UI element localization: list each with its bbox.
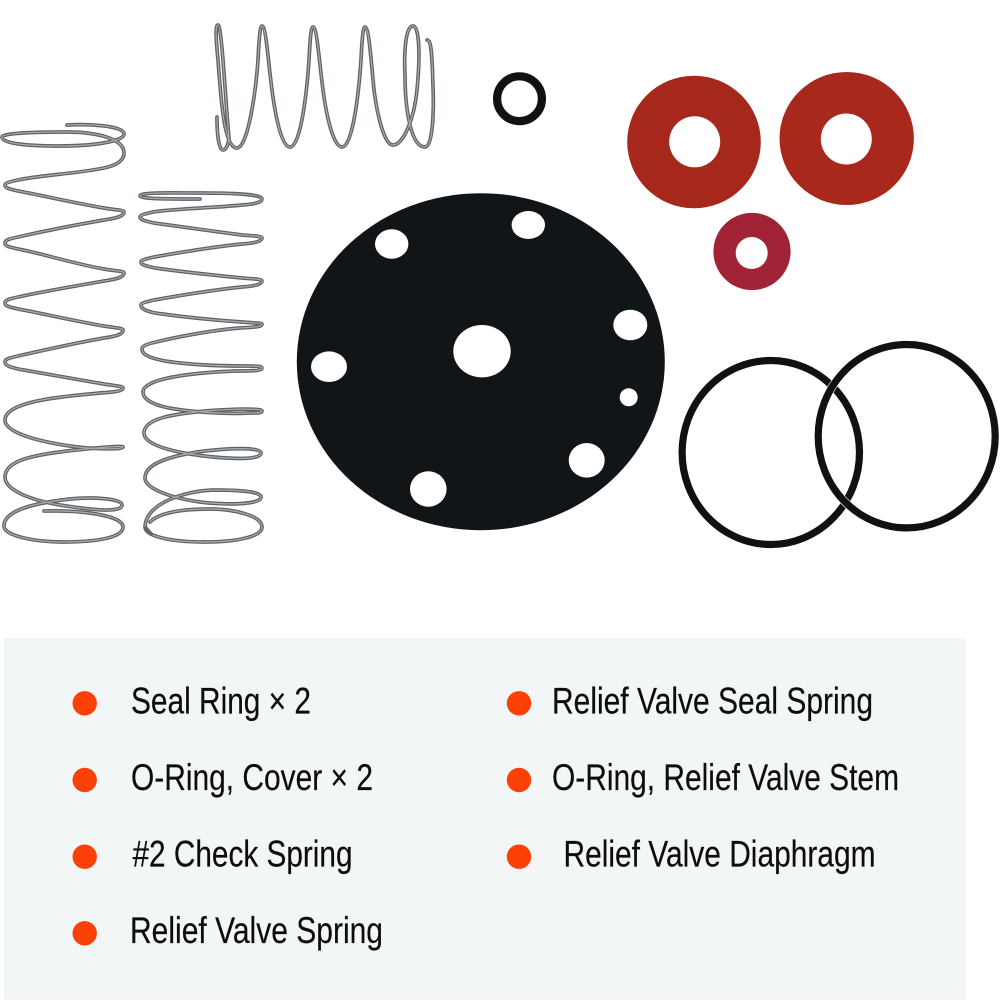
- bullet: [72, 768, 97, 792]
- text: relief valve spring: Relief Valve Spring: [130, 909, 383, 951]
- icon: red seal ring right: [780, 72, 914, 205]
- text: seal ring: Seal Ring × 2: [131, 679, 311, 721]
- icon: short spring (top): [216, 25, 433, 150]
- text: relief valve seal spring: Relief Valve Seal Spring: [552, 679, 873, 721]
- bullet: [507, 691, 531, 716]
- bullet: [507, 844, 531, 869]
- bullet: [72, 921, 97, 946]
- icon: tall spring (middle): [140, 193, 262, 542]
- icon: large o-rings pair: [682, 344, 995, 544]
- icon: relief valve diaphragm: [297, 193, 665, 530]
- text: relief valve diaphragm: Relief Valve Diaphragm: [564, 832, 876, 874]
- text: o-ring cover: O-Ring, Cover × 2: [131, 756, 373, 798]
- icon: tall spring (left): [2, 125, 124, 542]
- bullet: [72, 691, 97, 716]
- panel: parts list: [4, 638, 966, 1000]
- bullet: [72, 844, 97, 869]
- bullet: [507, 768, 531, 792]
- icon: red seal ring left: [627, 76, 761, 208]
- text: check spring: #2 Check Spring: [132, 832, 352, 874]
- icon: small red seal ring: [713, 213, 791, 290]
- text: o-ring relief valve stem: O-Ring, Relief Valve Stem: [552, 756, 899, 798]
- icon: small o-ring: [497, 76, 542, 121]
